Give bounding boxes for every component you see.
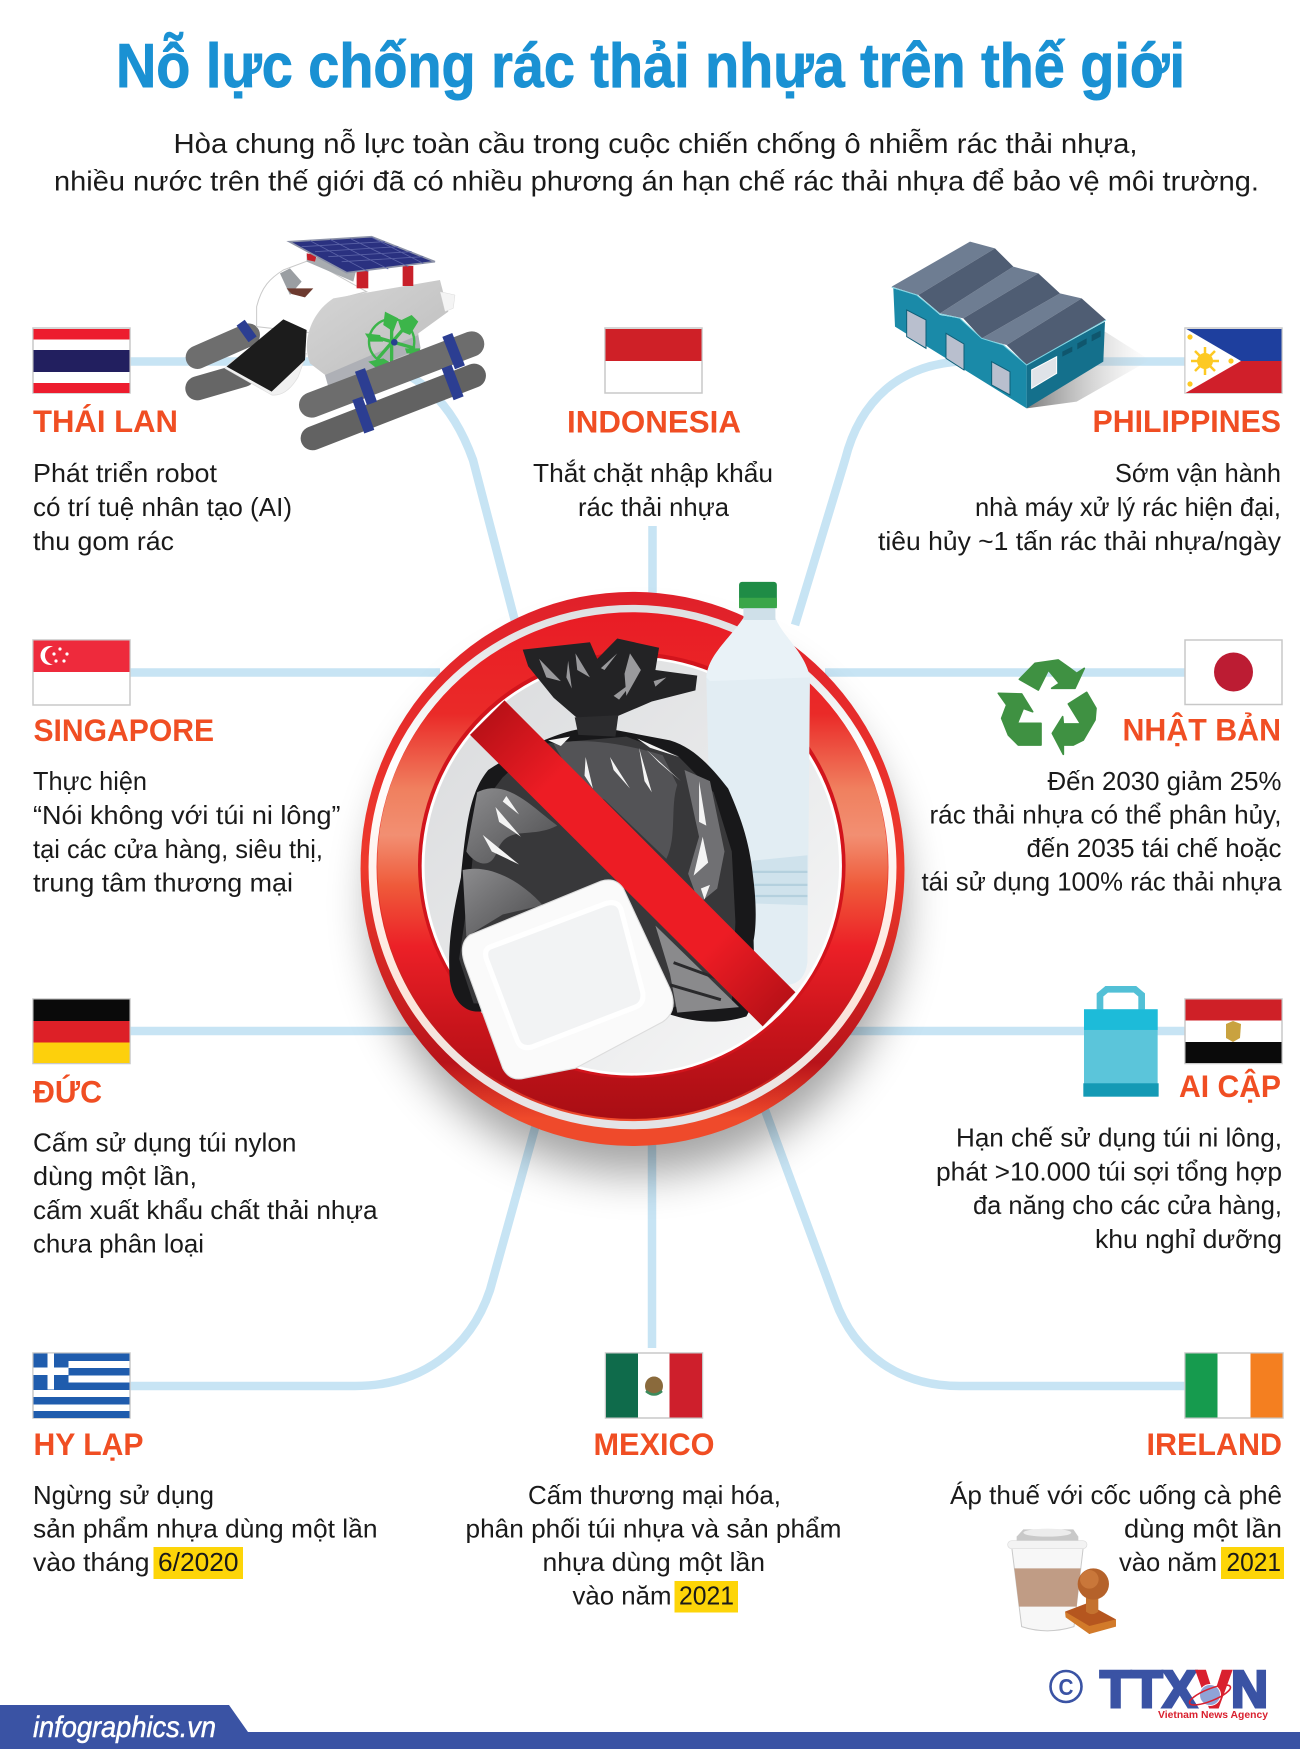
text: Đức <box>33 1128 378 1258</box>
footer website: infographics.vn <box>33 1711 216 1744</box>
heading: Hy Lạp: HY LẠP <box>34 1426 144 1462</box>
heading: Ireland: IRELAND <box>1146 1426 1282 1462</box>
TTXVN logo: TTXVN <box>1100 1661 1268 1719</box>
walls <box>893 288 1027 408</box>
flag: Mexico <box>606 1353 702 1418</box>
text: Ireland: Áp thuế với cốc uống cà phê <box>950 1480 1282 1510</box>
icon: reusable tote bag <box>1083 989 1159 1097</box>
robot body <box>257 260 367 333</box>
text: Thái Lan: có trí tuệ nhân tạo (AI) <box>33 492 292 522</box>
text: Mexico: nhựa dùng một lần <box>542 1547 765 1577</box>
robot illustration <box>197 237 474 438</box>
text: Thái Lan: thu gom rác <box>33 526 174 556</box>
text: Mexico: vào năm <box>572 1580 672 1610</box>
text: Nhật Bản <box>922 766 1282 896</box>
highlight: 2021: 2021 <box>1226 1547 1281 1577</box>
wooden stamp <box>1065 1568 1116 1634</box>
text: Nhật Bản: rác thải nhựa có thể phân hủy, <box>930 800 1282 830</box>
logo globe <box>1187 1681 1233 1709</box>
text: Ai Cập <box>936 1122 1282 1254</box>
copyright symbol <box>1050 1671 1082 1702</box>
text: Indonesia: rác thải nhựa <box>578 492 730 522</box>
text: Ai Cập: phát >10.000 túi sợi tổng hợp <box>936 1156 1282 1186</box>
text: Ireland <box>950 1480 1284 1579</box>
text: Indonesia: Thắt chặt nhập khẩu <box>533 458 773 488</box>
text: Đức: dùng một lần, <box>33 1161 197 1191</box>
text: Singapore: tại các cửa hàng, siêu thị, <box>33 834 323 864</box>
flag: Ireland <box>1185 1353 1283 1418</box>
text: Ai Cập: đa năng cho các cửa hàng, <box>973 1190 1282 1220</box>
text: Singapore: “Nói không với túi ni lông” <box>33 800 340 830</box>
flag: Indonesia <box>605 328 702 393</box>
text: Hy Lạp: vào tháng <box>33 1547 150 1577</box>
flag: Greece <box>33 1353 130 1418</box>
heading: Nhật Bản: NHẬT BẢN <box>1122 712 1281 748</box>
highlight: 2021: 2021 <box>679 1580 734 1610</box>
text: Ireland: vào năm <box>1119 1547 1217 1577</box>
text: Mexico: phân phối túi nhựa và sản phẩm <box>466 1514 842 1544</box>
text: Nhật Bản: tái sử dụng 100% rác thải nhựa <box>922 866 1282 896</box>
solar panel <box>289 237 435 288</box>
text: Ai Cập: Hạn chế sử dụng túi ni lông, <box>956 1122 1282 1152</box>
title: Nỗ lực chống rác thải nhựa trên thế giới <box>116 32 1185 101</box>
text: Philippines <box>878 458 1281 556</box>
text: Đức: Cấm sử dụng túi nylon <box>33 1128 296 1158</box>
flag: Thailand <box>33 328 130 393</box>
intro text: Hòa chung nỗ lực toàn cầu trong cuộc chiến chống ô nhiễm rác thải nhựa, <box>174 128 1138 159</box>
heading: Philippines: PHILIPPINES <box>1092 403 1281 439</box>
text: Đức: chưa phân loại <box>33 1228 204 1258</box>
heading: Singapore: SINGAPORE <box>34 712 214 748</box>
text: Hy Lạp: sản phẩm nhựa dùng một lần <box>33 1514 378 1544</box>
flag: Singapore <box>33 640 130 705</box>
icon: recycling symbol <box>998 660 1096 754</box>
doors and windows <box>907 310 1010 395</box>
text: Đức: cấm xuất khẩu chất thải nhựa <box>33 1195 378 1225</box>
text: Philippines: Sớm vận hành <box>1115 458 1281 488</box>
rear floats <box>197 323 253 388</box>
paddle wheel <box>365 312 421 368</box>
coffee cup <box>1008 1529 1087 1631</box>
text: Singapore: trung tâm thương mại <box>33 868 293 898</box>
foam food tray <box>462 880 673 1079</box>
sign shadow <box>372 633 903 1174</box>
text: Singapore <box>33 766 340 898</box>
heading: Ai Cập: AI CẬP <box>1179 1068 1281 1104</box>
text: Ai Cập: khu nghỉ dưỡng <box>1095 1224 1282 1254</box>
text: Mexico <box>466 1480 842 1612</box>
text: Thái Lan: Phát triển robot <box>33 458 218 488</box>
intro text <box>54 128 1259 196</box>
text: Philippines: tiêu hủy ~1 tấn rác thải nhựa/ngày <box>878 526 1281 556</box>
flag: Philippines <box>1185 328 1282 393</box>
flag: Egypt <box>1185 999 1282 1064</box>
plastic bottle <box>706 582 810 985</box>
icon: coffee cup and stamp <box>1008 1529 1116 1634</box>
roof <box>892 242 1082 345</box>
text: Nhật Bản: Đến 2030 giảm 25% <box>1048 766 1282 796</box>
central no-plastic sign <box>361 582 904 1174</box>
text: Mexico: Cấm thương mại hóa, <box>528 1480 781 1510</box>
copyright symbol: C <box>1058 1674 1074 1700</box>
black garbage bag <box>449 639 756 1022</box>
highlight: 6/2020: 6/2020 <box>158 1547 238 1577</box>
text: Nhật Bản: đến 2035 tái chế hoặc <box>1026 833 1282 863</box>
heading: Mexico: MEXICO <box>594 1426 714 1462</box>
text: Ireland: dùng một lần <box>1124 1514 1282 1544</box>
factory illustration <box>892 242 1150 408</box>
heading: Đức: ĐỨC <box>33 1074 102 1110</box>
heading: Thái Lan: THÁI LAN <box>33 403 178 439</box>
flag: Germany <box>33 999 130 1064</box>
footer bar <box>0 1705 1300 1749</box>
intro text: nhiều nước trên thế giới đã có nhiều phương án hạn chế rác thải nhựa để bảo vệ môi trường. <box>54 166 1259 196</box>
flag: Japan <box>1185 640 1282 704</box>
text: Thái Lan <box>33 458 292 556</box>
connector lines <box>130 361 1185 1386</box>
TTXVN logo: Vietnam News Agency <box>1158 1709 1268 1721</box>
prohibition ring <box>361 592 904 1146</box>
text: Hy Lạp <box>33 1480 378 1579</box>
factory shadow <box>1027 332 1150 408</box>
conveyor belt <box>225 353 307 395</box>
text: Hy Lạp: Ngừng sử dụng <box>33 1480 214 1510</box>
text: Singapore: Thực hiện <box>33 766 147 796</box>
text: Philippines: nhà máy xử lý rác hiện đại, <box>975 492 1281 522</box>
prohibition bar <box>470 700 795 1026</box>
heading: Indonesia: INDONESIA <box>567 404 741 440</box>
front floats <box>312 335 474 438</box>
text: Indonesia <box>533 458 773 522</box>
